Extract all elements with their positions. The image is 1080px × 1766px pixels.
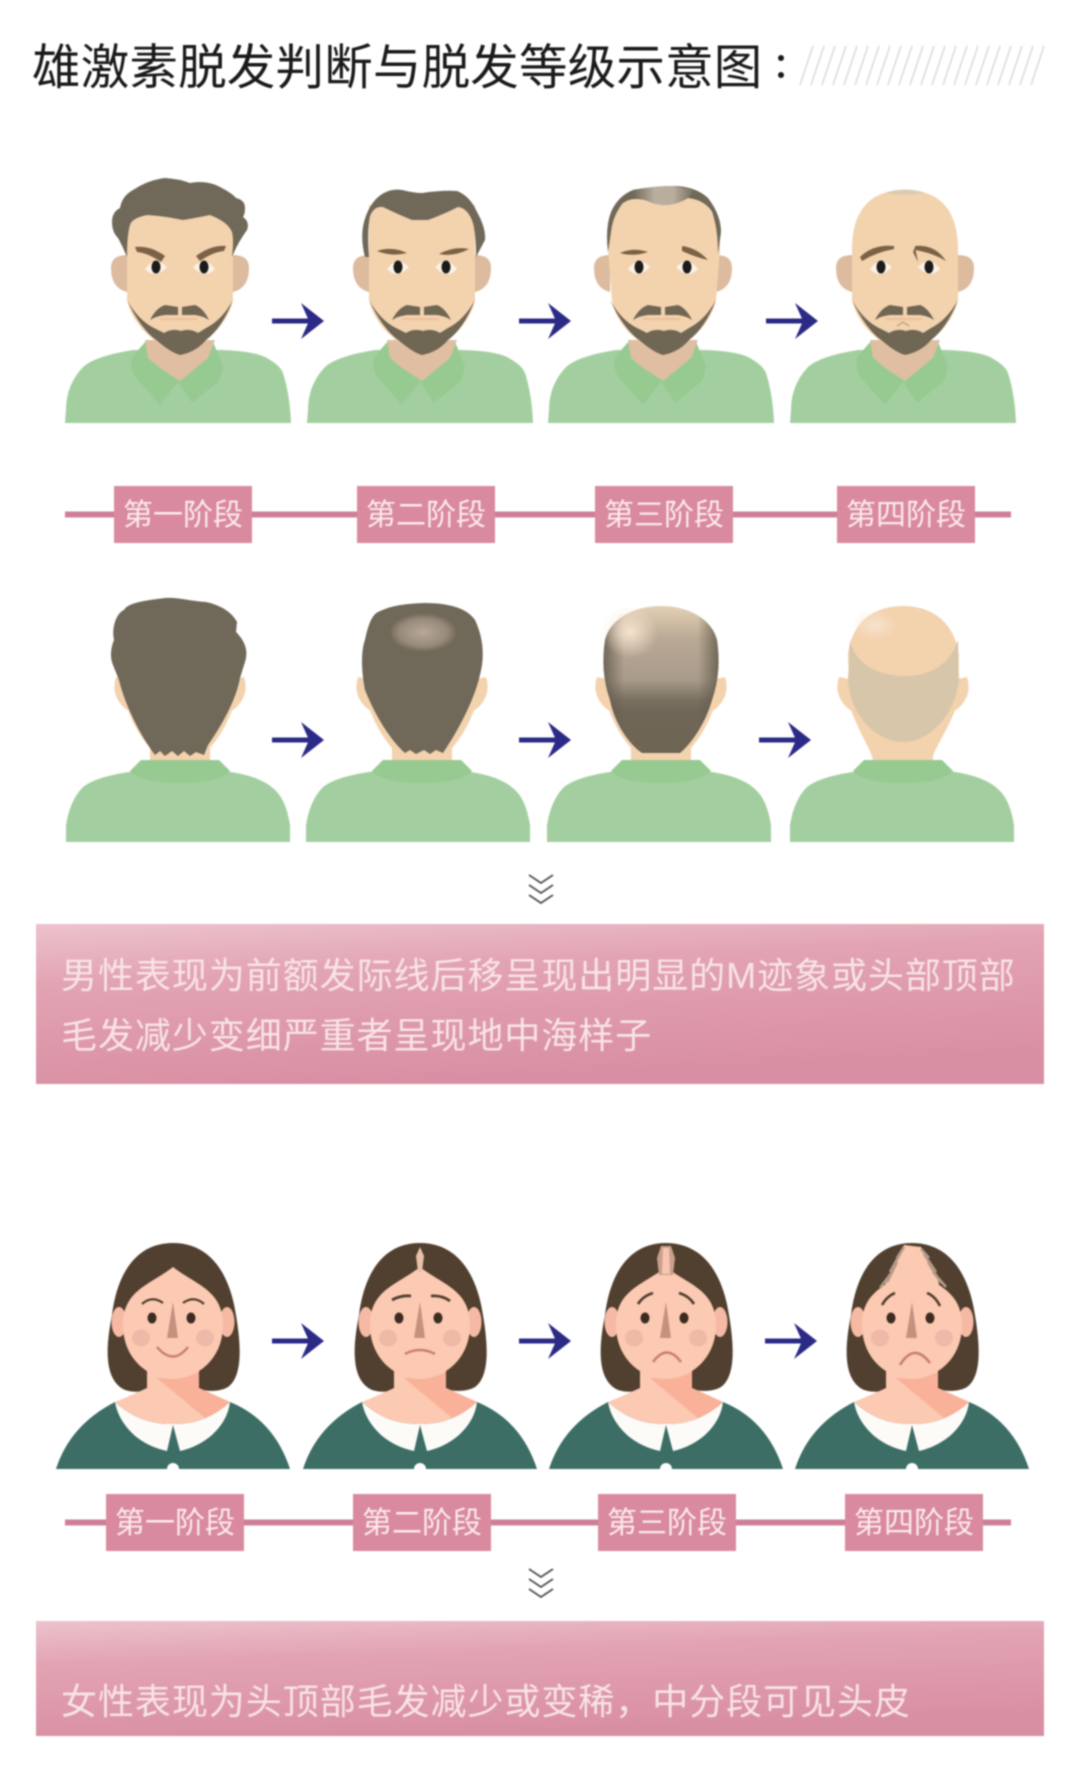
widened parting [657,1246,675,1275]
bald patch [389,613,457,652]
woman stage 3 [549,1243,783,1469]
stage labels row 1: 第一阶段 [123,499,243,532]
curly hair [112,178,248,257]
panel: male description: 男性表现为前额发际线后移呈现出明显的M迹象或头部顶部 [61,955,1016,996]
woman stage 4 [795,1243,1029,1469]
stage labels row 2 [65,1494,1011,1551]
arrow row 3 [272,1323,817,1359]
man front stage 2 [307,190,533,423]
smile [157,1347,188,1356]
faint crown hair [885,190,925,195]
stage labels row 1: 第三阶段 [604,499,724,532]
title colon [778,55,784,78]
chevrons down 2 [529,1569,553,1597]
man back stage 2 [306,603,530,842]
receding hair [362,190,485,257]
thinning hair rim [607,186,721,254]
woman stage 1 [56,1243,290,1469]
stage labels row 1 [65,486,1011,543]
stage labels row 2: 第四阶段 [854,1507,974,1540]
man front stage 1 [65,178,291,423]
slight frown [405,1350,435,1354]
sad brows [882,1293,940,1306]
arched brows [142,1299,204,1304]
darker side fringe [603,606,719,753]
panel: male description [36,924,1044,1084]
panel: male description: 毛发减少变细严重者呈现地中海样子 [61,1015,652,1056]
man back stage 4 [790,606,1014,842]
man back stage 3 [547,606,771,842]
stage labels row 1: 第四阶段 [846,499,966,532]
hair parting [416,1247,424,1272]
frown [653,1352,681,1362]
residual pale hair [848,640,959,742]
deep frown [900,1353,930,1365]
sad brows [392,1296,450,1301]
panel: female description [36,1621,1044,1736]
scalp highlight [602,606,658,658]
hair with thinning crown [362,603,483,754]
panel: female description: 女性表现为头顶部毛发减少或变稀，中分段可见头皮 [61,1681,911,1722]
decorative hatch stripes [800,46,1044,85]
arrow row 1 [272,303,818,339]
stage labels row 2: 第二阶段 [362,1507,482,1540]
man front stage 3 [548,186,774,423]
scalp highlight [853,610,897,640]
title: 雄激素脱发判断与脱发等级示意图 [32,41,763,95]
mouth wrinkle [897,322,909,326]
stage labels row 1: 第二阶段 [366,499,486,532]
worried brows [620,246,708,260]
balding crown with gradient [603,606,719,753]
stage labels row 2: 第三阶段 [607,1507,727,1540]
stage labels row 2: 第一阶段 [115,1507,235,1540]
thinning crown [885,1245,939,1285]
arrow row 2 [272,722,811,758]
woman stage 2 [303,1243,537,1469]
full hair from behind [111,598,246,756]
angry brows [135,246,226,262]
crown fading [633,186,695,205]
man back stage 1 [66,598,290,842]
man front stage 4 [790,190,1016,423]
sad brows [860,246,946,262]
flat brows [377,248,469,255]
sad brows [638,1293,694,1304]
chevrons down 1 [529,875,553,903]
